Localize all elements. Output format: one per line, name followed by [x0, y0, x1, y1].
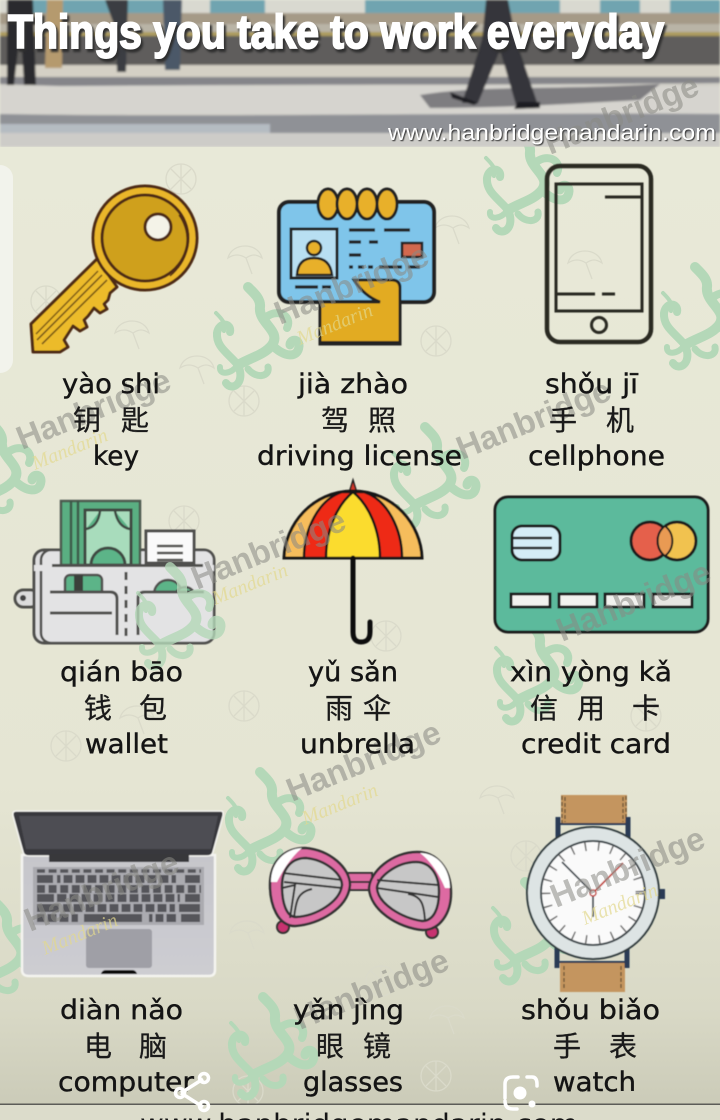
label: credit card: [510, 657, 672, 760]
Hanbridge Mandarin watermarks overlay: Hanbridge: [551, 553, 716, 648]
footer divider and strip: [0, 1104, 720, 1120]
label: glasses: yǎn jìng: [293, 995, 404, 1026]
label: driving license: jià zhào: [297, 369, 408, 400]
icon: laptop: [13, 811, 223, 976]
icon: glasses: [270, 848, 451, 938]
label: driving license: [257, 369, 462, 472]
label: umbrella: [300, 657, 415, 760]
label: cellphone: cellphone: [528, 441, 665, 472]
Hanbridge Mandarin watermarks overlay: Mandarin: [293, 299, 376, 350]
label: umbrella: yǔ sǎn: [308, 657, 398, 688]
label: computer: diàn nǎo: [60, 995, 183, 1026]
label: watch: [521, 995, 660, 1098]
label: cellphone: shǒu jī: [545, 369, 639, 400]
icon: key: [31, 186, 197, 352]
label: credit card: xìn yòng kǎ: [510, 657, 672, 688]
label: computer: computer: [58, 1067, 195, 1098]
icon: umbrella: [284, 480, 422, 642]
icon: share overlay: [176, 1074, 208, 1110]
label: wallet: qián bāo: [60, 657, 183, 688]
Hanbridge Mandarin watermarks overlay: Hanbridge: [269, 236, 434, 331]
label: cellphone: 手机: [549, 405, 634, 436]
label: credit card: credit card: [521, 729, 671, 760]
Hanbridge Mandarin watermarks overlay: Hanbridge: [186, 501, 351, 596]
label: glasses: 眼镜: [316, 1031, 391, 1062]
label: wallet: wallet: [85, 729, 168, 760]
icon: driving license: [279, 189, 434, 345]
Hanbridge Mandarin watermarks overlay: Hanbridge: [451, 371, 616, 466]
Hanbridge Mandarin watermarks overlay: Hanbridge: [545, 819, 710, 914]
label: computer: 电脑: [84, 1031, 167, 1062]
Hanbridge Mandarin watermarks overlay: Hanbridge: [11, 361, 176, 456]
website url top: www.hanbridgemandarin.com: [387, 120, 716, 145]
label: key: key: [93, 441, 139, 472]
label: driving license: 驾照: [321, 405, 396, 436]
Hanbridge Mandarin watermarks overlay: Mandarin: [28, 424, 111, 475]
label: computer: [58, 995, 195, 1098]
label: wallet: 钱包: [84, 693, 167, 724]
icon: wallet: [15, 501, 214, 643]
Hanbridge Mandarin watermarks overlay: Mandarin: [578, 879, 661, 930]
label: glasses: [293, 995, 404, 1098]
label: key: 钥匙: [73, 405, 149, 436]
Hanbridge Mandarin watermarks overlay: Mandarin: [208, 559, 291, 610]
icon: lens overlay: [505, 1077, 537, 1109]
icon: watch: [527, 795, 665, 992]
icon: credit card: [495, 497, 708, 632]
label: wallet: [60, 657, 183, 760]
Hanbridge Mandarin watermarks overlay: Hanbridge: [539, 66, 704, 161]
label: watch: shǒu biǎo: [521, 995, 660, 1026]
label: umbrella: unbrella: [300, 729, 415, 760]
label: cellphone: [528, 369, 665, 472]
label: credit card: 信用卡: [530, 693, 660, 724]
label: umbrella: 雨伞: [325, 693, 391, 724]
Hanbridge Mandarin watermarks overlay: Hanbridge: [19, 843, 184, 938]
Hanbridge Mandarin watermarks overlay: Hanbridge: [281, 713, 446, 808]
label: driving license: driving license: [257, 441, 462, 472]
icon: cellphone: [547, 166, 651, 342]
Hanbridge Mandarin watermarks overlay: Mandarin: [298, 779, 381, 830]
label: key: yào shi: [62, 369, 160, 400]
label: key: [62, 369, 160, 472]
Hanbridge Mandarin watermarks overlay: Mandarin: [38, 909, 121, 960]
label: watch: 手表: [553, 1031, 637, 1062]
label: glasses: glasses: [303, 1067, 403, 1098]
Hanbridge Mandarin watermarks overlay: Hanbridge: [289, 941, 454, 1036]
header photo banner: [0, 0, 720, 147]
side overlay tab: [0, 165, 13, 373]
label: watch: watch: [553, 1067, 636, 1098]
